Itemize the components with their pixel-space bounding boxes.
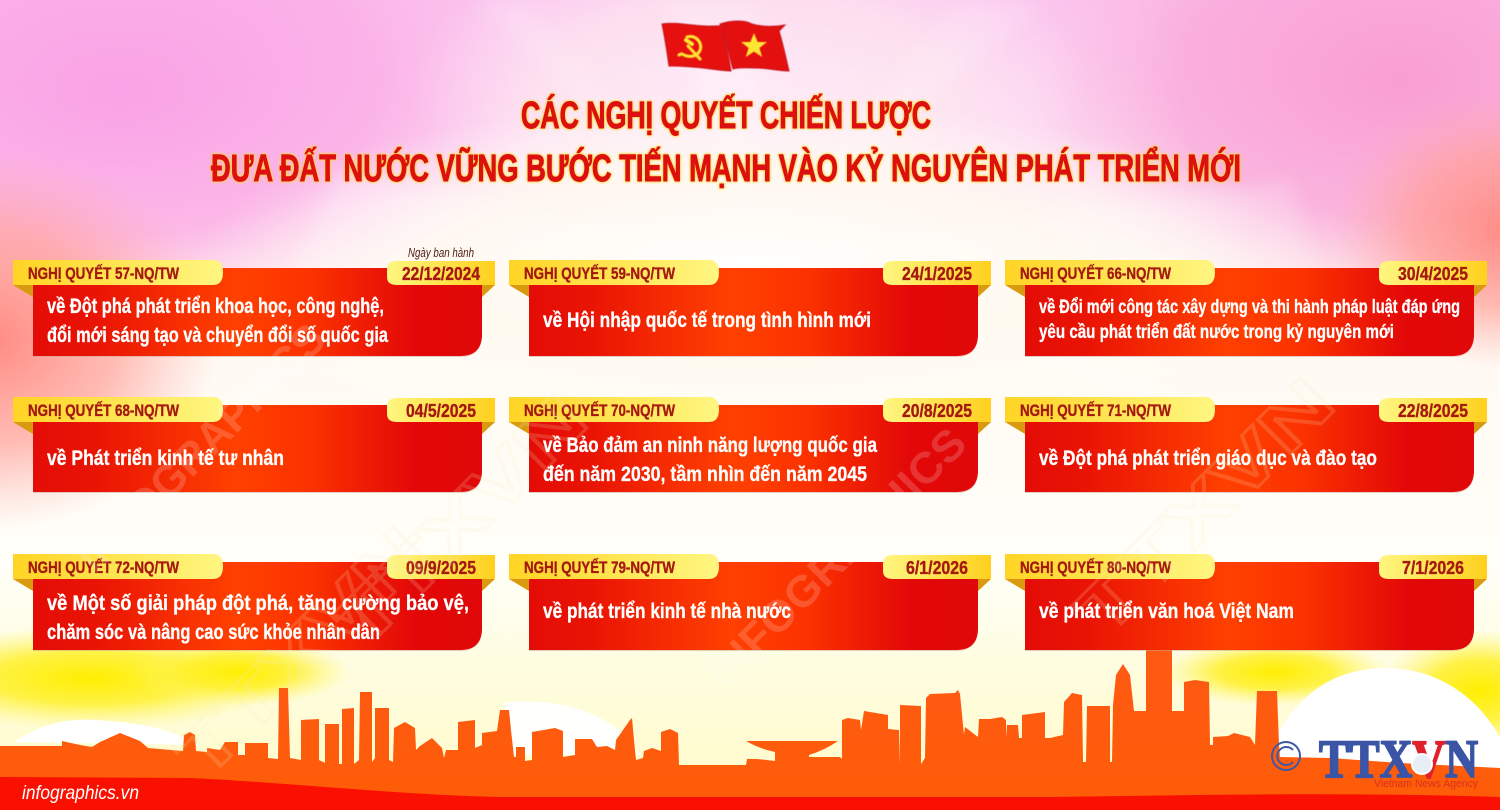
panel: resolution 57: đổi mới sáng tạo và chuyển đổi số quốc gia [47,324,388,347]
panel: resolution 57: NGHỊ QUYẾT 57-NQ/TW [28,264,180,283]
panel: resolution 70: 20/8/2025 [902,401,972,421]
panel: resolution 57: 22/12/2024 [402,264,480,284]
watermark: TTXVN [1060,362,1349,651]
panel: resolution 59 [509,260,991,357]
panel: resolution 68: 04/5/2025 [406,401,476,421]
panel: resolution 68 [13,397,495,493]
panel: resolution 80: NGHỊ QUYẾT 80-NQ/TW [1020,558,1172,577]
website credit: infographics.vn [22,783,139,804]
panel: resolution 66: NGHỊ QUYẾT 66-NQ/TW [1020,264,1172,283]
watermark: TTXVN [320,379,602,661]
panel: resolution 66: 30/4/2025 [1398,264,1468,284]
panel: resolution 57 [13,260,495,357]
panel: resolution 71 [1005,397,1487,493]
panel: resolution 72: về Một số giải pháp đột phá, tăng cường bảo vệ, [47,592,469,615]
bottom red band [0,777,1500,810]
panel: resolution 66: yêu cầu phát triển đất nước trong kỷ nguyên mới [1039,322,1394,343]
watermark: INFOGRAPHICS [697,418,976,697]
panel: resolution 80: về phát triển văn hoá Việt Nam [1039,600,1294,623]
panel: resolution 71: 22/8/2025 [1398,401,1468,421]
panel: resolution 80: 7/1/2026 [1402,558,1464,578]
panel: resolution 66 [1005,260,1487,357]
skyline [0,650,1500,810]
panel: resolution 70: đến năm 2030, tầm nhìn đến năm 2045 [543,463,867,486]
panel: resolution 79: về phát triển kinh tế nhà nước [543,600,791,623]
icon: party flag [662,23,731,71]
panel: resolution 80 [1005,554,1487,651]
panel: resolution 71: NGHỊ QUYẾT 71-NQ/TW [1020,401,1172,420]
panel: resolution 59: NGHỊ QUYẾT 59-NQ/TW [524,264,676,283]
panel: resolution 79: NGHỊ QUYẾT 79-NQ/TW [524,558,676,577]
icon: Vietnam flag [720,21,789,71]
panel: resolution 79 [509,554,991,651]
title [211,93,1241,190]
panel: resolution 68: về Phát triển kinh tế tư nhân [47,447,284,470]
watermark [67,314,1349,793]
panel: resolution 70: về Bảo đảm an ninh năng lượng quốc gia [543,434,877,457]
panel: resolution 70 [509,397,991,493]
panel: resolution 72: chăm sóc và nâng cao sức khỏe nhân dân [47,621,380,644]
panel: resolution 59: 24/1/2025 [902,264,972,284]
logo: TTXVN: Vietnam News Agency [1374,778,1478,790]
watermark: INFOGRAPHICS [67,314,335,582]
panel: resolution 70: NGHỊ QUYẾT 70-NQ/TW [524,401,676,420]
issue date caption: Ngày ban hành [408,246,474,260]
panel: resolution 79: 6/1/2026 [906,558,968,578]
panel: resolution 68: NGHỊ QUYẾT 68-NQ/TW [28,401,180,420]
panel: resolution 59: về Hội nhập quốc tế trong tình hình mới [543,309,871,332]
logo: TTXVN: TTXVN [1319,729,1478,789]
icon: copyright [1272,742,1300,770]
watermark: TTXVN [160,511,442,793]
flags [662,21,789,71]
title: CÁC NGHỊ QUYẾT CHIẾN LƯỢC [521,93,931,137]
panel: resolution 72: NGHỊ QUYẾT 72-NQ/TW [28,558,180,577]
panel: resolution 72 [13,554,495,651]
panel: resolution 71: về Đột phá phát triển giáo dục và đào tạo [1039,447,1377,470]
panel: resolution 72: 09/9/2025 [406,558,476,578]
panel: resolution 57: về Đột phá phát triển khoa học, công nghệ, [47,295,384,318]
